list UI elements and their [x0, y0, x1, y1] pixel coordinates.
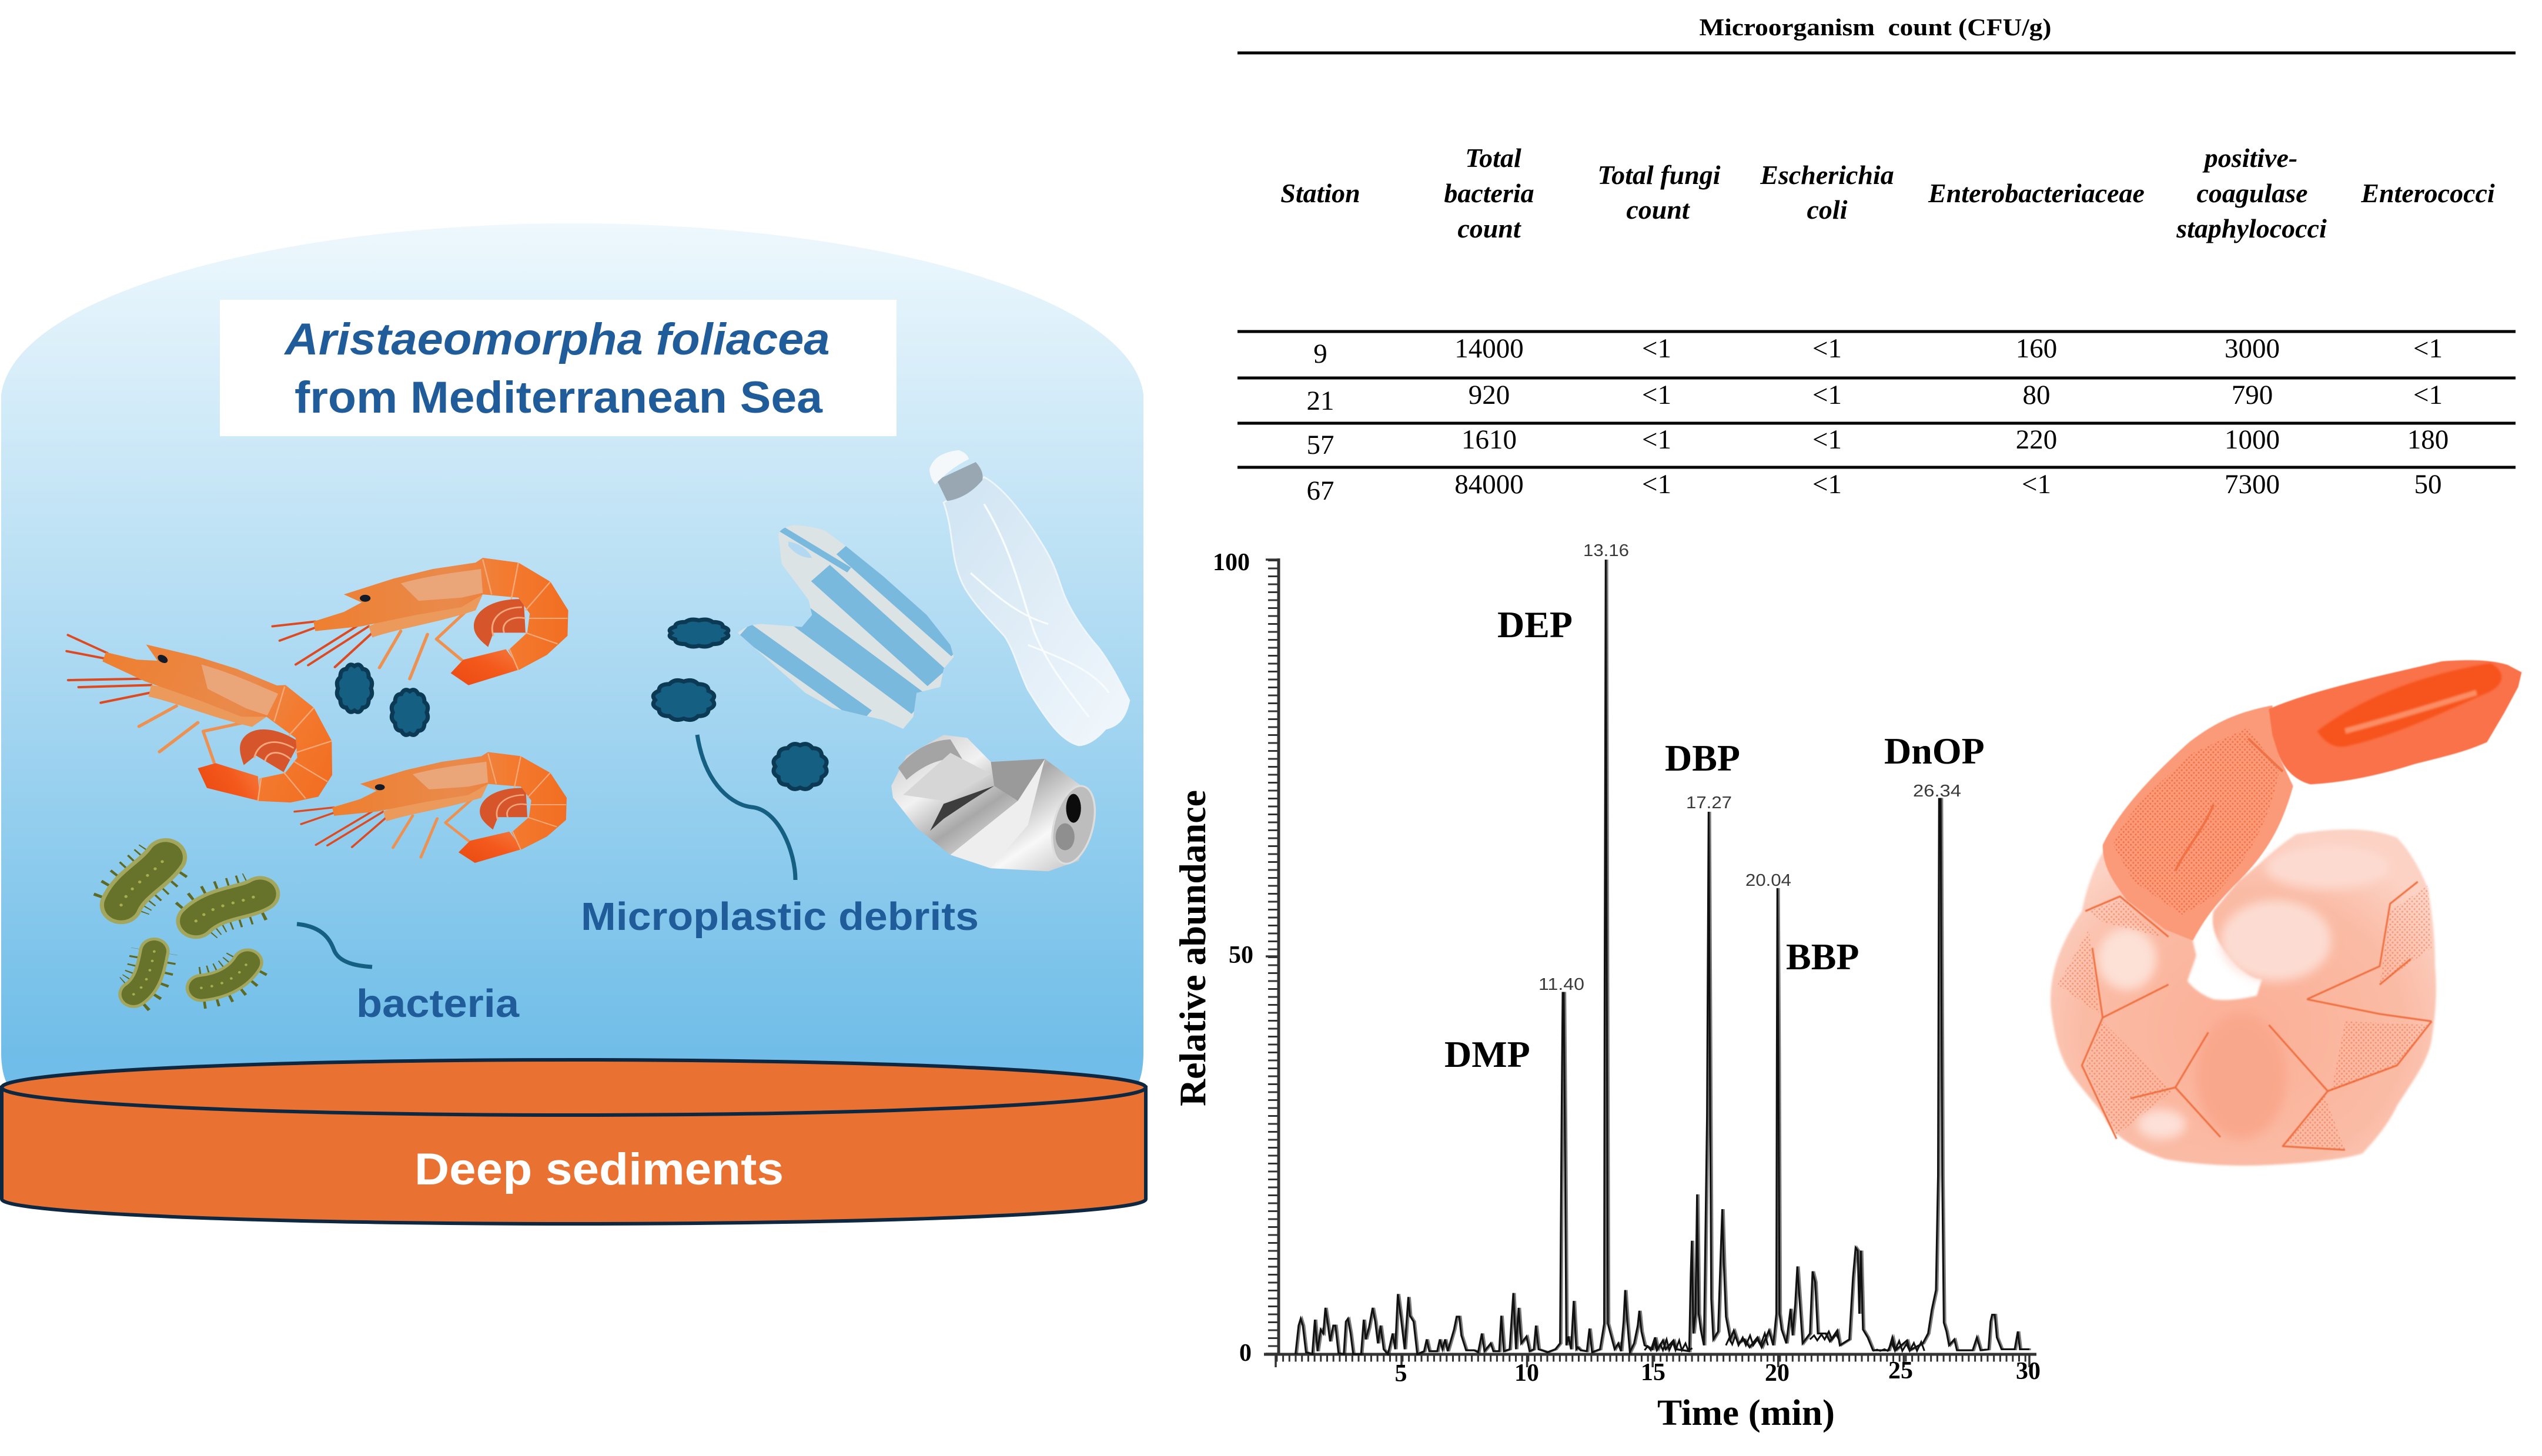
- x axis labels: 10: [1514, 1360, 1539, 1387]
- table column headers: coli: [1807, 195, 1848, 225]
- icon: plastic bag: [738, 525, 961, 729]
- table rows: <1: [1642, 424, 1671, 455]
- table column headers: staphylococci: [2176, 213, 2327, 243]
- peak retention time labels: 17.27: [1686, 794, 1732, 812]
- phthalate compound labels: DEP: [1497, 604, 1573, 645]
- image: peeled shrimp: [2051, 660, 2521, 1166]
- icon: shrimp left: [37, 575, 360, 840]
- chart: chromatogram: [1172, 541, 2041, 1433]
- table rows: 80: [2022, 380, 2051, 410]
- shrimp shell: [2103, 705, 2293, 940]
- table column headers: bacteria: [1444, 178, 1534, 208]
- table column headers: count: [1457, 213, 1521, 243]
- table rows: 180: [2407, 424, 2449, 455]
- phthalate compound labels: DnOP: [1884, 730, 1985, 772]
- table rows: <1: [2022, 469, 2051, 500]
- x axis labels: 5: [1394, 1360, 1407, 1387]
- shrimp segment lines: [2082, 882, 2431, 1150]
- phthalate compound labels: DBP: [1665, 737, 1740, 779]
- peak retention time labels: 20.04: [1745, 871, 1791, 890]
- icon: crushed can: [891, 735, 1102, 871]
- peak retention time labels: [1538, 541, 1961, 994]
- panel: sea water cylinder: [1, 223, 1143, 1093]
- peak retention time labels: 26.34: [1913, 782, 1961, 801]
- x axis labels: 30: [2016, 1358, 2041, 1385]
- table rows: 67: [1306, 476, 1334, 506]
- table rows: 790: [2232, 380, 2273, 410]
- shrimp speckled patches: [2058, 885, 2431, 1150]
- peak retention time labels: 13.16: [1583, 541, 1629, 560]
- table: microorganism count: [1237, 14, 2516, 506]
- table column headers: coagulase: [2196, 178, 2308, 208]
- title box: Aristaeomorpha foliacea: [283, 314, 830, 364]
- table column headers: Enterobacteriaceae: [1928, 178, 2145, 208]
- label: microplastic debrits: Microplastic debrits: [581, 895, 979, 939]
- arrow: microplastic callout line: [697, 735, 795, 880]
- label: bacteria: bacteria: [356, 982, 520, 1026]
- icon: plastic bottle: [929, 450, 1129, 745]
- title box: from Mediterranean Sea: [295, 373, 823, 423]
- table rows: 57: [1306, 430, 1334, 460]
- chart axes: [1264, 558, 2036, 1367]
- table rows: 14000: [1454, 333, 1524, 364]
- icon: shrimp bottom: [295, 752, 567, 863]
- table rows: <1: [2413, 380, 2443, 410]
- table column headers: Enterococci: [2360, 178, 2495, 208]
- table rows: <1: [1642, 380, 1671, 410]
- phthalate compound labels: DMP: [1444, 1033, 1530, 1075]
- x axis labels: [1394, 1357, 2041, 1387]
- table rows: 920: [1469, 380, 1510, 410]
- table rows: 160: [2016, 333, 2057, 364]
- table rows: <1: [1812, 424, 1842, 455]
- y axis labels: 50: [1229, 942, 1253, 969]
- table rows: <1: [1812, 380, 1842, 410]
- table rows: 84000: [1454, 469, 1524, 500]
- table rows: 9: [1313, 339, 1327, 369]
- table column headers: Station: [1280, 178, 1360, 208]
- table rows: 1610: [1461, 424, 1517, 455]
- table rows: <1: [1642, 469, 1671, 500]
- panel: deep sediments disc: [2, 1060, 1146, 1224]
- x axis labels: 15: [1641, 1359, 1665, 1386]
- table rows: 50: [2414, 469, 2442, 500]
- table rows: 3000: [2225, 333, 2280, 364]
- table column headers: Total: [1465, 143, 1521, 173]
- y axis title: Relative abundance: [1172, 790, 1213, 1106]
- phthalate compound labels: [1444, 604, 1985, 1075]
- peak retention time labels: 11.40: [1538, 975, 1584, 994]
- title box: [220, 300, 897, 436]
- table rows: 220: [2016, 424, 2057, 455]
- table column headers: Escherichia: [1760, 160, 1894, 190]
- icon: shrimp top: [273, 558, 568, 685]
- y axis labels: 0: [1239, 1340, 1252, 1367]
- y axis labels: [1213, 549, 1253, 1367]
- arrow: bacteria callout line: [297, 924, 372, 967]
- table column headers: Total fungi: [1597, 160, 1721, 190]
- x axis labels: 20: [1765, 1360, 1790, 1387]
- icon: microplastic particles: [337, 620, 827, 789]
- table rows: 7300: [2225, 469, 2280, 500]
- table column headers: positive-: [2202, 143, 2297, 173]
- shrimp tail: [2269, 660, 2521, 784]
- shrimp flesh: [2051, 829, 2436, 1166]
- phthalate compound labels: BBP: [1786, 936, 1859, 978]
- table rows: <1: [1812, 469, 1842, 500]
- chart trace: [1296, 560, 2031, 1354]
- table column headers: [1280, 143, 2495, 243]
- y axis labels: 100: [1213, 549, 1250, 576]
- table column headers: count: [1626, 195, 1690, 225]
- table title: Microorganism count (CFU/g): [1699, 14, 2052, 41]
- table rows: <1: [1812, 333, 1842, 364]
- table rows: 1000: [2225, 424, 2280, 455]
- x axis title: Time (min): [1657, 1393, 1835, 1433]
- icon: bacteria cluster: [121, 857, 260, 995]
- table rows: [1306, 333, 2449, 506]
- table rows: 21: [1306, 386, 1334, 416]
- table rows: <1: [2413, 333, 2443, 364]
- x axis labels: 25: [1888, 1357, 1913, 1384]
- table rows: <1: [1642, 333, 1671, 364]
- heading: deep sediments: Deep sediments: [414, 1144, 784, 1194]
